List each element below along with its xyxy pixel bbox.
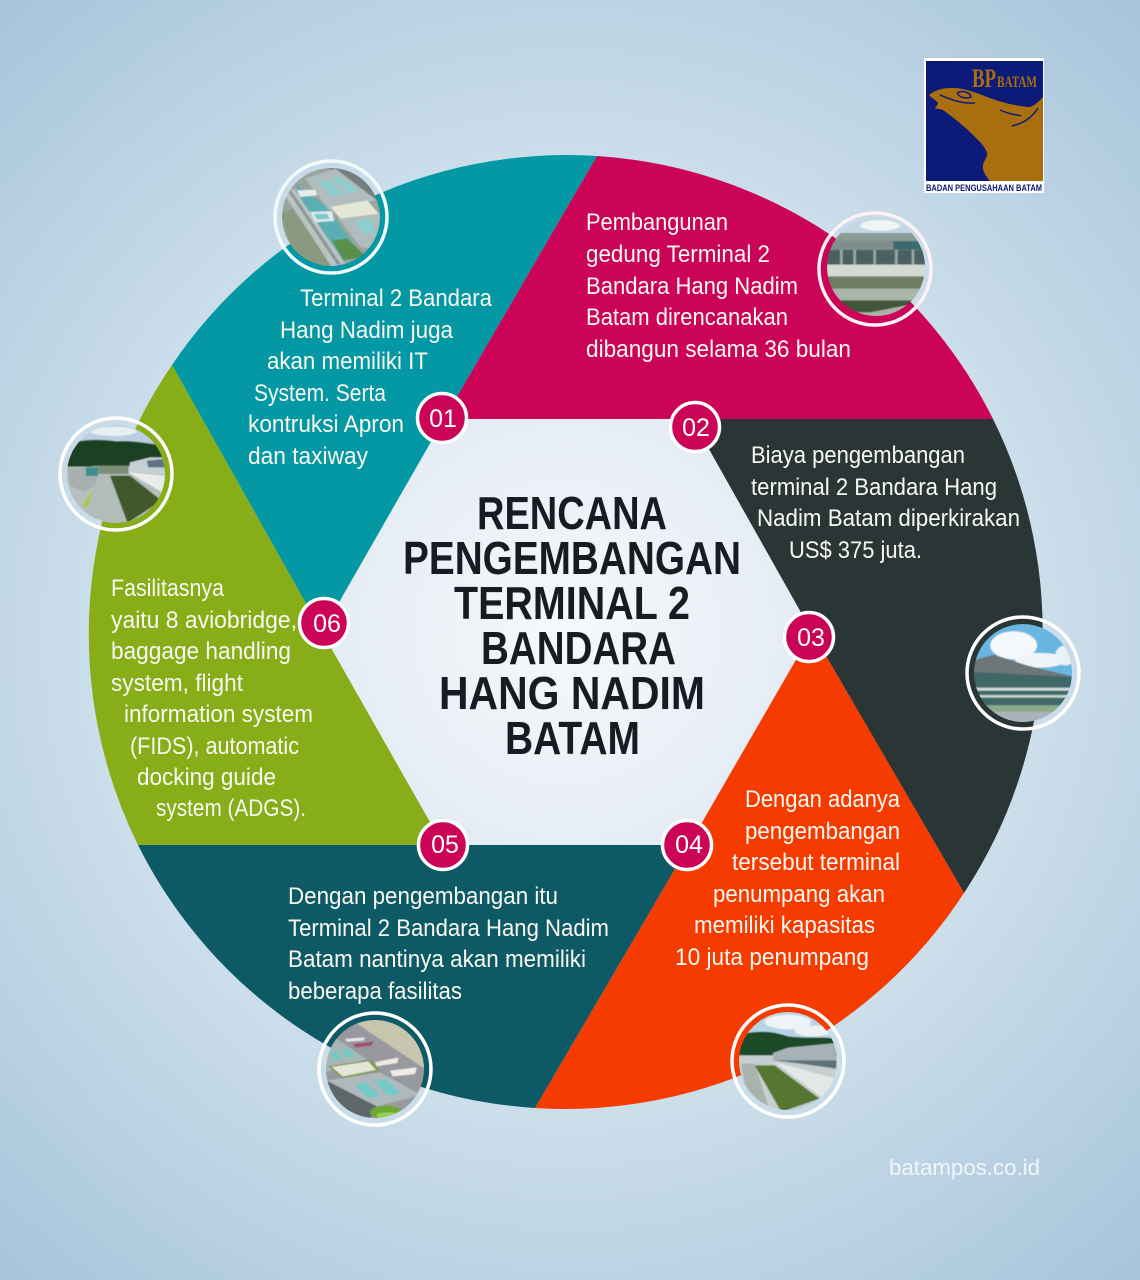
badge 04: [662, 820, 712, 870]
text 05: Dengan pengembangan itu: [288, 883, 558, 910]
badge 05: 05: [431, 831, 459, 859]
panel 06: green: [89, 365, 443, 845]
text 01: System. Serta: [254, 380, 387, 407]
text 06: information system: [124, 701, 313, 728]
text 05: Terminal 2 Bandara Hang Nadim: [288, 915, 609, 942]
badge 05: [418, 820, 468, 870]
text 03: US$ 375 juta.: [789, 537, 922, 564]
panel 04: orange: [535, 632, 964, 1109]
text 06: system, flight: [111, 670, 243, 697]
text 05: [288, 883, 609, 1005]
badge 06: 06: [313, 610, 341, 638]
text 04: pengembangan: [745, 818, 900, 845]
badge 03: [784, 612, 834, 662]
photo 02: terminal front: [819, 213, 931, 325]
text 04: 10 juta penumpang: [675, 944, 869, 971]
badge 03: 03: [797, 624, 825, 652]
text 01: Terminal 2 Bandara: [300, 285, 493, 312]
text 06: system (ADGS).: [156, 795, 306, 822]
text 03: terminal 2 Bandara Hang: [751, 474, 997, 501]
text 01: akan memiliki IT: [267, 348, 428, 375]
photo 01: aerial terminal: [275, 161, 387, 273]
text 06: Fasilitasnya: [111, 575, 225, 602]
title: PENGEMBANGAN: [403, 532, 741, 584]
text 03: Nadim Batam diperkirakan: [757, 505, 1020, 532]
text 02: gedung Terminal 2: [586, 241, 770, 268]
panel 01: teal: [172, 155, 597, 632]
title: HANG NADIM: [439, 667, 705, 719]
text 06: docking guide: [137, 764, 276, 791]
center hexagon: [322, 419, 812, 845]
title: BATAM: [505, 712, 640, 764]
logo: BP Batam: BATAM: [997, 74, 1037, 91]
panel 03: charcoal: [692, 419, 1043, 893]
badge 06: [300, 598, 348, 648]
badge 01: 01: [429, 405, 457, 433]
title: [403, 487, 741, 764]
badge 02: 02: [682, 414, 710, 442]
photo 06: approach road and hills: [60, 418, 172, 530]
text 02: Bandara Hang Nadim: [586, 273, 798, 300]
text 01: Hang Nadim juga: [280, 317, 454, 344]
text 06: yaitu 8 aviobridge,: [111, 607, 297, 634]
text 04: memiliki kapasitas: [694, 912, 875, 939]
text 04: [675, 786, 901, 971]
text 01: dan taxiway: [248, 443, 368, 470]
text 01: kontruksi Apron: [248, 411, 404, 438]
text 02: dibangun selama 36 bulan: [586, 336, 851, 363]
text 04: tersebut terminal: [732, 849, 900, 876]
text 02: Batam direncanakan: [586, 304, 788, 331]
text 03: [751, 442, 1020, 564]
text 02: [586, 209, 851, 363]
badge 02: [670, 402, 720, 452]
text 06: baggage handling: [111, 638, 291, 665]
text 05: Batam nantinya akan memiliki: [288, 946, 586, 973]
credit: batampos.co.id: batampos.co.id: [889, 1155, 1040, 1180]
panel 02: magenta: [444, 156, 993, 419]
title: TERMINAL 2: [454, 577, 690, 629]
panel 05: dark teal: [138, 845, 689, 1108]
photo 04: hills and terminal: [732, 1005, 844, 1117]
text 06: [111, 575, 313, 822]
logo: BP Batam: BADAN PENGUSAHAAN BATAM: [926, 183, 1042, 193]
text 02: Pembangunan: [586, 209, 728, 236]
text 03: Biaya pengembangan: [751, 442, 965, 469]
text 01: [248, 285, 493, 470]
badge 04: 04: [675, 831, 703, 859]
text 04: Dengan adanya: [745, 786, 901, 813]
logo: BP Batam: BP: [972, 64, 996, 93]
title: BANDARA: [481, 622, 676, 674]
photo 03: terminal with blue sky: [967, 617, 1079, 729]
text 06: (FIDS), automatic: [130, 733, 299, 760]
text 05: beberapa fasilitas: [288, 978, 462, 1005]
photo 05: apron aerial: [319, 1013, 431, 1125]
text 04: penumpang akan: [713, 881, 885, 908]
badge 01: [418, 394, 466, 442]
title: RENCANA: [477, 487, 667, 539]
logo: BP Batam: [924, 58, 1044, 193]
